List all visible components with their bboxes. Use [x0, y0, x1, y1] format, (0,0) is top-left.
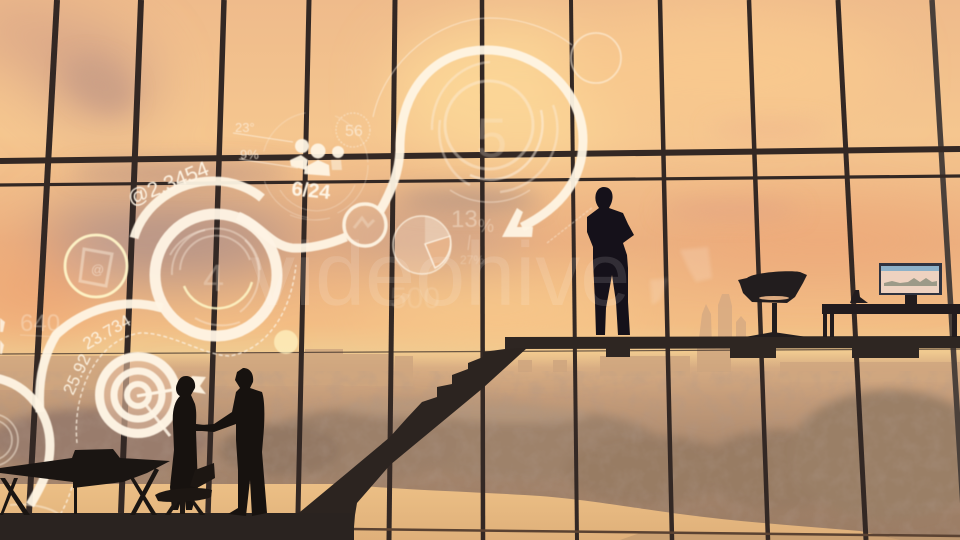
labels: 13 percent: 27% [460, 253, 484, 267]
dial: circle with number 5: 5 [476, 106, 507, 169]
dial: circle with number 5 [432, 62, 557, 202]
chair by handshake [155, 463, 215, 515]
labels: 13 percent [451, 206, 494, 267]
edge icon fragment [0, 318, 5, 354]
dial rings around people icon [262, 112, 368, 220]
left ring fragments [0, 414, 60, 515]
desk on platform [822, 290, 960, 337]
labels: 23 and 9 percent [233, 120, 298, 168]
silhouette: woman shaking hands [170, 376, 213, 510]
pie chart icon [393, 216, 451, 274]
ribbon: lower left arc into ring [0, 304, 162, 505]
badge: 56: 56 [345, 123, 363, 140]
icon: target with arrow [96, 353, 206, 437]
dashed arcs [60, 265, 296, 515]
holographic data overlay [0, 18, 712, 515]
ring 4 ribbon arc with @2.3454 [124, 157, 262, 238]
labels: 23 and 9 percent: 9% [240, 147, 259, 162]
silhouette: man shaking hands [202, 368, 267, 516]
ribbon: main curved line with arrow [238, 50, 583, 248]
monitor with chart [879, 263, 942, 295]
data labels along arc: 23.734 [80, 311, 134, 353]
node ring on ribbon [344, 204, 386, 246]
labels: 23 and 9 percent: 23° [235, 120, 255, 135]
small ring top right [571, 33, 621, 83]
dial: large circle with number 4: 4 [203, 258, 224, 300]
river [0, 484, 900, 540]
faint digits: 500: 500 [390, 282, 440, 315]
badge: 56 [336, 113, 370, 147]
silhouette: standing man on platform [587, 187, 634, 335]
labels: 13 percent: % [478, 216, 494, 236]
icon: address book badge: @ [91, 262, 104, 277]
outer thin arc [373, 18, 572, 117]
icon: ribbon arrowhead [502, 208, 533, 237]
faint map shapes near right [650, 247, 712, 305]
glow spots [274, 330, 298, 354]
watermark: videohive [250, 225, 630, 325]
people icon with 6/24 [290, 139, 344, 204]
label: 640: 640 [20, 310, 60, 337]
labels: 13 percent: 13 [451, 206, 478, 233]
chair on platform [738, 271, 807, 337]
tree line [0, 390, 960, 520]
people icon with 6/24: 6/24 [290, 178, 332, 204]
data labels along arc: 25.92 [59, 351, 95, 398]
distant skyline [699, 294, 746, 348]
icon: address book badge [65, 235, 127, 297]
ring 4 ribbon arc with @2.3454: @2.3454 [124, 157, 212, 211]
data labels along arc [59, 311, 134, 398]
desk lower left [0, 449, 170, 515]
upper platform [505, 336, 960, 358]
dial: large circle with number 4 [155, 214, 277, 336]
dashed leader to figure [547, 207, 593, 243]
staircase [298, 348, 527, 540]
city buildings on horizon [0, 346, 960, 390]
foliage texture [0, 385, 960, 525]
lower floor [0, 513, 354, 540]
